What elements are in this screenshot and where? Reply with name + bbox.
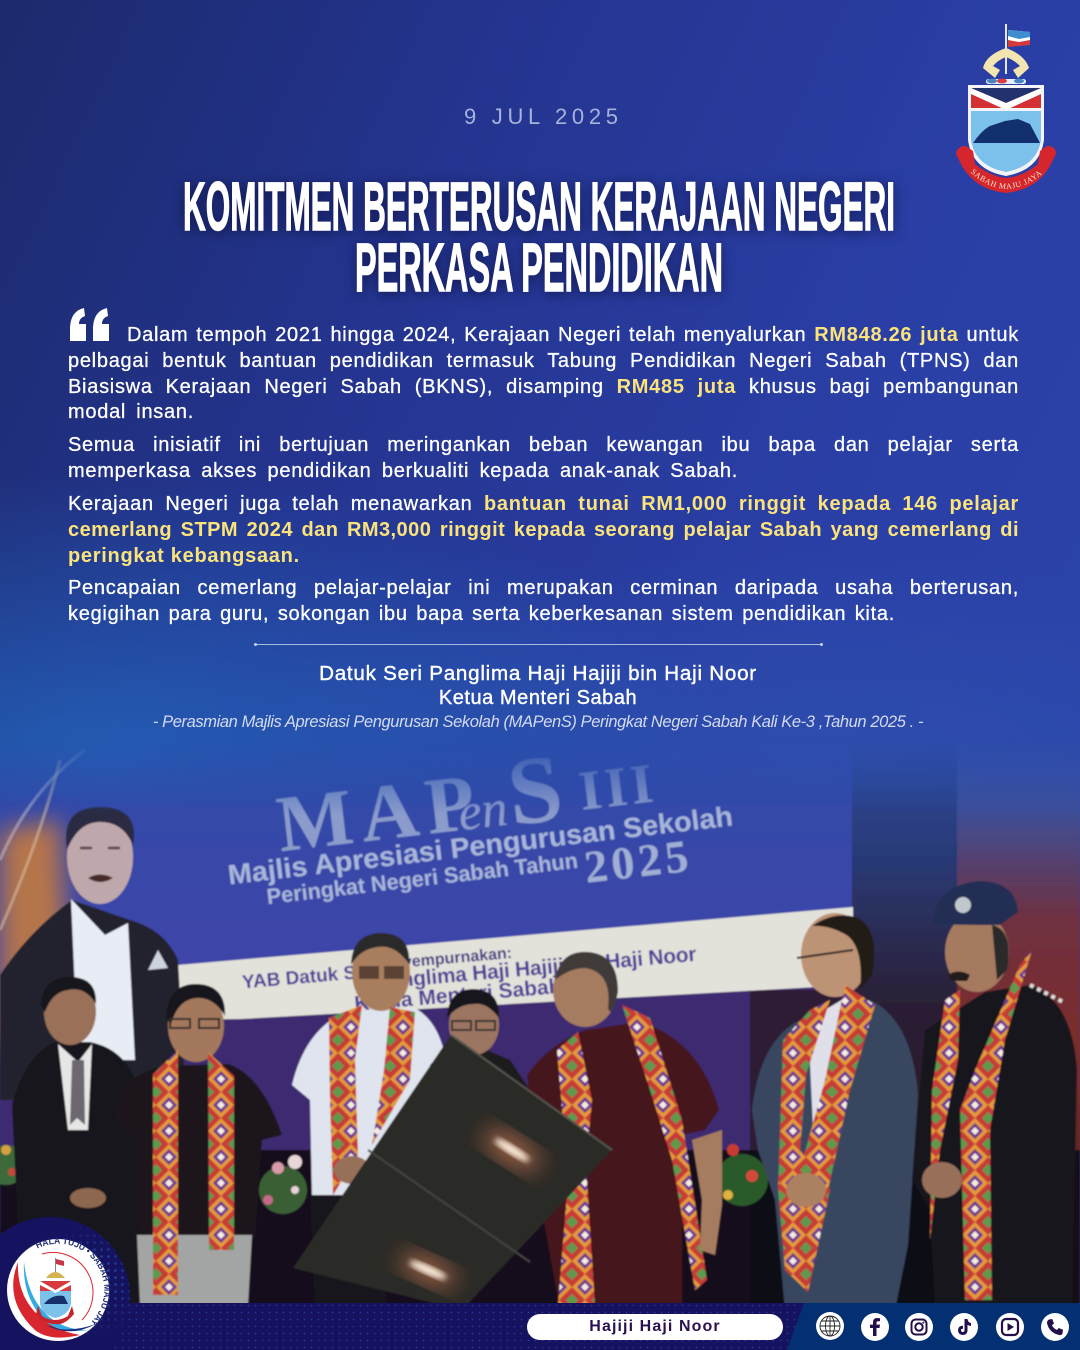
screen title: S	[502, 734, 568, 846]
ribbon motto: SABAH MAJU JAYA	[970, 169, 1042, 190]
flag	[1005, 24, 1030, 74]
screen portrait	[0, 807, 186, 1100]
man in blue blazer with scarf	[752, 913, 918, 1310]
paragraph 4: achievement: kegigihan para guru, sokongan ibu bapa serta keberkesanan sistem pendidikan kita.	[68, 603, 895, 625]
emblem: Sabah coat of arms	[956, 24, 1056, 193]
handle pill	[527, 1314, 783, 1340]
icon: phone	[1041, 1313, 1069, 1341]
screen title	[228, 758, 733, 905]
man in maroon shirt with scarf	[527, 952, 722, 1310]
handle pill: Hajiji Haji Noor	[589, 1318, 721, 1335]
flowers	[0, 1144, 768, 1214]
paragraph 2: initiative purpose	[68, 434, 1019, 482]
logo: Hala Tuju Sabah Maju Jaya badge	[0, 1217, 130, 1348]
screen title: Majlis Apresiasi Pengurusan Sekolah	[226, 800, 734, 891]
event note: - Perasmian Majlis Apresiasi Pengurusan Sekolah (MAPenS) Peringkat Negeri Sabah Kali Ke-3 ,Tahun 2025 . -	[153, 713, 923, 731]
ribbon motto	[956, 146, 1056, 193]
arms holding flagpole	[983, 48, 1029, 78]
icon: tiktok	[950, 1313, 978, 1341]
screen title: Peringkat Negeri Sabah Tahun	[265, 848, 579, 909]
paragraph 1: funding figures	[68, 324, 1019, 423]
attribution block	[153, 643, 924, 731]
icon: youtube play	[996, 1313, 1024, 1341]
man left in black suit	[12, 977, 140, 1310]
photo: event on stage: Panglima Haji Hajiji bin Haji Noor	[375, 943, 697, 994]
icon: website globe	[816, 1312, 844, 1340]
paragraph 4: achievement	[68, 577, 1019, 625]
man in black shirt with scarf	[134, 983, 282, 1303]
paragraph 1: funding figures: Biasiswa Kerajaan Negeri Sabah (BKNS), disamping RM485 juta khusus bagi pembangunan	[68, 376, 1019, 398]
screen title: 2025	[582, 830, 695, 893]
shield	[968, 85, 1044, 176]
paragraph 3: cash aid	[68, 493, 1019, 567]
photo: event on stage	[0, 750, 1080, 1303]
mini emblem	[36, 1258, 74, 1324]
footer bar	[110, 1303, 1080, 1350]
white banner	[178, 907, 853, 1020]
title	[178, 168, 900, 306]
paragraph 1: funding figures: modal insan.	[68, 401, 194, 423]
paragraph 2: initiative purpose: Semua inisiatif ini bertujuan meringankan beban kewangan ibu bapa dan pelajar serta	[68, 434, 1019, 456]
date: 9 JUL 2025	[464, 104, 623, 129]
paragraph 1: funding figures: Dalam tempoh 2021 hingga 2024, Kerajaan Negeri telah menyalurkan RM848.26 juta untuk	[127, 324, 1019, 346]
screen title: III	[576, 752, 660, 823]
lower screen and floor darkness	[0, 986, 816, 1260]
paragraph 2: initiative purpose: memperkasa akses pendidikan berkualiti kepada anak-anak Sabah.	[68, 460, 738, 482]
paragraph 1: funding figures: pelbagai bentuk bantuan pendidikan termasuk Tabung Pendidikan Negeri Sabah (TPNS) dan	[68, 350, 1019, 372]
man in white shirt with scarf	[292, 933, 448, 1305]
paragraph 4: achievement: Pencapaian cemerlang pelajar-pelajar ini merupakan cerminan daripada usaha berterusan,	[68, 577, 1019, 599]
paragraph 3: cash aid: peringkat kebangsaan.	[68, 545, 300, 567]
plaque	[293, 1035, 612, 1310]
speaker role: Ketua Menteri Sabah	[439, 687, 637, 709]
stage backdrop	[0, 766, 852, 974]
icon: opening quotation mark	[70, 308, 109, 341]
photo: event on stage: Menyempurnakan:	[370, 945, 513, 974]
icon: instagram	[905, 1313, 933, 1341]
police officer	[912, 881, 1077, 1310]
screen title: MAP	[272, 758, 487, 869]
paragraph 3: cash aid: cemerlang STPM 2024 dan RM3,000 ringgit kepada seorang pelajar Sabah yang cemerlang di	[68, 519, 1019, 541]
photo: event on stage: YAB Datuk Seri	[241, 961, 380, 993]
paragraph 3: cash aid: Kerajaan Negeri juga telah menawarkan bantuan tunai RM1,000 ringgit kepada 146 pelajar	[68, 493, 1019, 515]
wreath	[986, 79, 1026, 84]
icon: facebook	[861, 1313, 889, 1341]
man behind	[430, 989, 530, 1100]
speaker name: Datuk Seri Panglima Haji Hajiji bin Haji Noor	[319, 662, 757, 685]
screen title: en	[455, 780, 510, 842]
photo: event on stage: Ketua Menteri Sabah	[353, 975, 562, 1016]
